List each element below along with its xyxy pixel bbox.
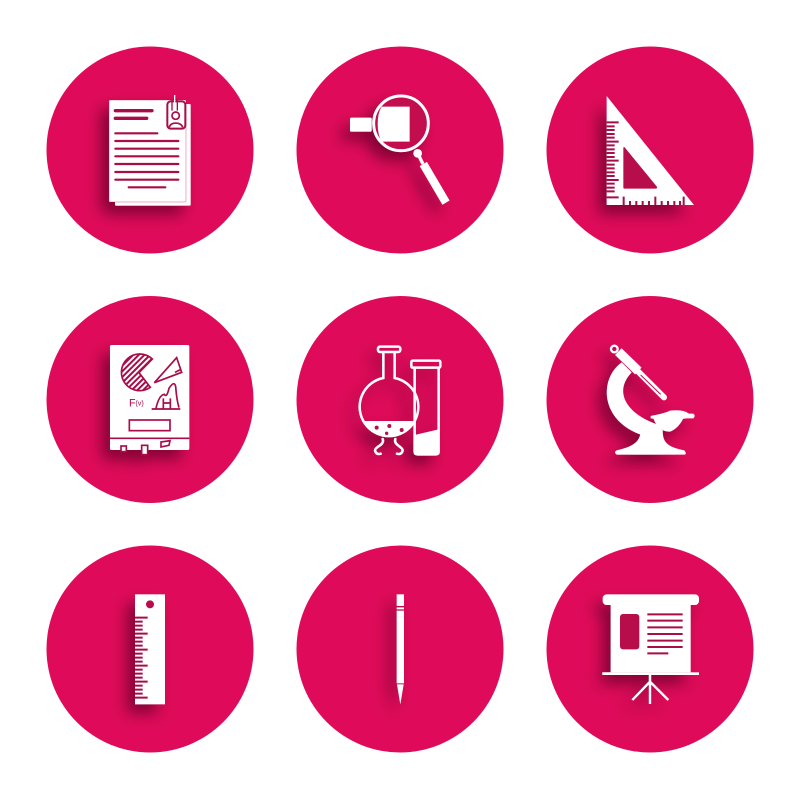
- circle: middle right: [546, 296, 754, 503]
- icon: resume document with paperclip: [109, 95, 191, 206]
- icon: set square triangle ruler: [607, 96, 694, 205]
- circle: center: [296, 296, 504, 503]
- icon: microscope: [607, 346, 695, 455]
- icon: pencil: [396, 594, 405, 704]
- icon: report sheet with charts: [110, 345, 189, 455]
- circle: top left: [46, 46, 254, 254]
- circle: bottom middle: [296, 546, 504, 752]
- icon: magnifying glass: [350, 96, 446, 203]
- circle: top right: [546, 46, 754, 254]
- icon: report sheet with charts: (v): [135, 399, 144, 408]
- circle: bottom right: [546, 546, 754, 752]
- icon: presentation board on tripod: [602, 594, 699, 704]
- circle: bottom left: [46, 546, 254, 752]
- circle: top middle: [296, 46, 504, 254]
- circle: middle left: [46, 296, 254, 503]
- icon: report sheet with charts: F: [129, 398, 136, 410]
- icon: ruler: [135, 594, 165, 704]
- icon: flask and test tube: [360, 347, 440, 454]
